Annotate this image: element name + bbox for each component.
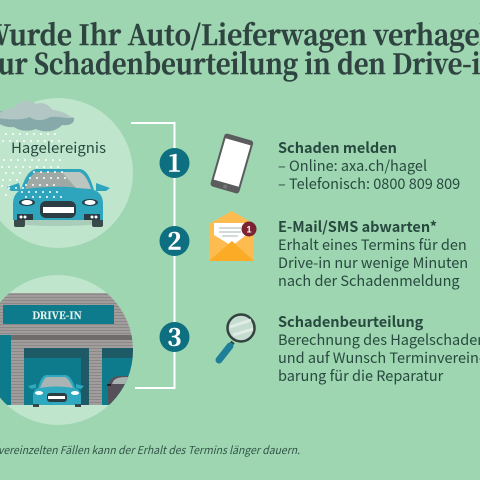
icon: smartphone	[210, 133, 254, 194]
title	[0, 14, 480, 83]
text block: step 3: barung für die Reparatur	[278, 365, 444, 386]
icon: car in garage	[28, 375, 84, 407]
hail dots on car	[9, 172, 68, 197]
icon: magnifying glass	[219, 314, 254, 360]
icon: car	[7, 169, 110, 227]
panel: hail event	[0, 98, 133, 248]
mirrors	[7, 183, 110, 191]
icon: cloud	[0, 101, 74, 131]
circle background	[0, 275, 133, 425]
connector line	[131, 123, 174, 388]
notification badge: 1	[246, 224, 252, 234]
text block: step 2: E-Mail/SMS abwarten*	[278, 216, 437, 237]
text block: step 2: nach der Schadenmeldung	[278, 270, 460, 291]
circle background	[0, 98, 133, 248]
second car	[107, 376, 128, 404]
step 2 badge	[160, 222, 190, 256]
step 2 badge: 2	[167, 222, 182, 256]
text block: step 2: Drive-in nur wenige Minuten	[278, 252, 468, 273]
text block: step 3: und auf Wunsch Terminverein-	[278, 347, 480, 368]
step 3 badge	[160, 318, 190, 352]
label: Hagelereignis: Hagelereignis	[11, 137, 106, 158]
text block: step 3: Schadenbeurteilung	[278, 311, 424, 332]
text block: step 3	[278, 311, 480, 386]
panel: drive-in	[0, 275, 142, 425]
text block: step 1: – Online: axa.ch/hagel	[278, 155, 427, 176]
icon: envelope	[209, 211, 256, 261]
text block: step 1: – Telefonisch: 0800 809 809	[278, 173, 460, 194]
text block: step 1	[278, 137, 460, 194]
text block: step 2: Erhalt eines Termins für den	[278, 234, 467, 255]
text block: step 2	[278, 216, 468, 291]
step 1 badge: 1	[167, 144, 182, 178]
text block: step 1: Schaden melden	[278, 137, 397, 158]
sign: DRIVE-IN: DRIVE-IN	[32, 307, 82, 322]
step 3 badge: 3	[167, 318, 182, 352]
step 1 badge	[160, 144, 190, 178]
hail dots	[2, 134, 66, 195]
sign: DRIVE-IN	[3, 305, 114, 324]
building	[0, 293, 142, 405]
